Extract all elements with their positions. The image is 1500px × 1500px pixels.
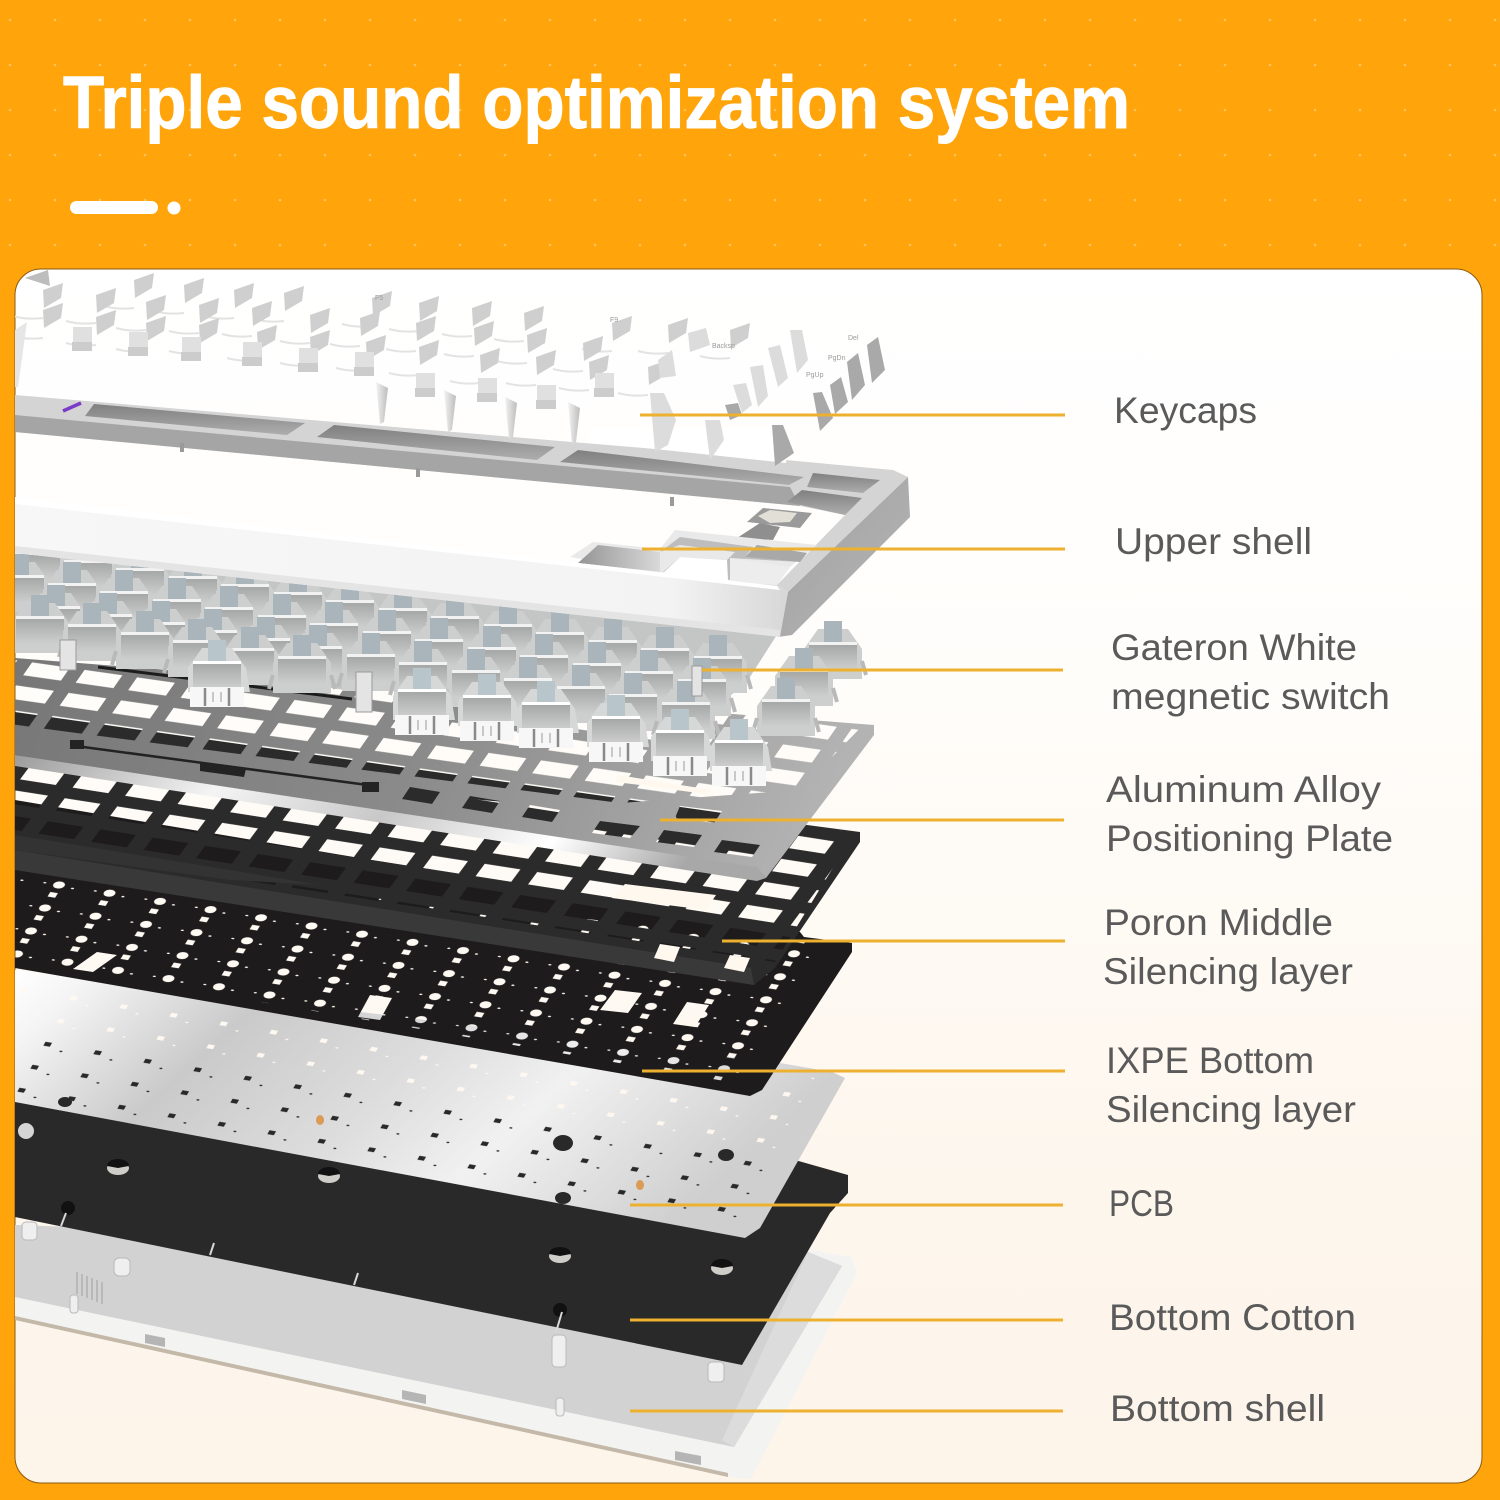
cutout band: [615, 775, 720, 796]
callout: IXPE Bottom Silencing layer: [642, 1040, 1356, 1130]
stabilizer clips: [60, 640, 702, 712]
callout: Aluminum Alloy Positioning Plate: Aluminum Alloy: [1106, 769, 1382, 810]
key legends: Backsp: [712, 343, 735, 350]
row 1 keys: [104, 273, 154, 309]
key legends: F9: [610, 317, 618, 324]
layer: bottom shell: [15, 1222, 857, 1479]
screw posts: [22, 1222, 724, 1416]
callout: Bottom shell: Bottom shell: [1110, 1388, 1325, 1429]
see-through windows: [612, 884, 750, 972]
panel: exploded keyboard card: [15, 269, 1482, 1483]
callout: Poron Middle Silencing layer: Silencing layer: [1103, 951, 1353, 992]
key legends: PgDn: [828, 355, 846, 362]
title: Triple sound optimization system: [63, 61, 1130, 144]
layer: IXPE bottom silencing sheet: [15, 800, 852, 1096]
layer: PCB: [15, 970, 845, 1238]
background dot pattern: [0, 0, 1500, 268]
right frame side face: [778, 477, 910, 637]
corner block: [730, 580, 770, 584]
callout: Gateron White megnetic switch: [702, 627, 1390, 717]
key legends: F5: [375, 295, 383, 302]
layer: bottom cotton: [15, 1025, 848, 1365]
window through corner: [663, 557, 728, 580]
gold screws on PCB: [316, 1115, 644, 1190]
key legends: Del: [848, 335, 859, 342]
right side key walls: [650, 328, 808, 460]
callout: Poron Middle Silencing layer: [722, 902, 1353, 992]
key stems: [376, 382, 388, 424]
callout: Aluminum Alloy Positioning Plate: Positioning Plate: [1106, 818, 1393, 859]
corner key shadow: [25, 270, 50, 286]
key sides: [72, 327, 92, 351]
callout: IXPE Bottom Silencing layer: IXPE Bottom: [1106, 1040, 1314, 1081]
layer: keycaps: [13, 270, 885, 466]
callout: Aluminum Alloy Positioning Plate: [660, 769, 1393, 859]
locating pins: [180, 443, 674, 506]
knob beam and mount: [737, 523, 780, 540]
back rail and right frame top: [15, 395, 908, 592]
rail pockets: [85, 404, 880, 515]
callout: Upper shell: Upper shell: [1115, 521, 1312, 562]
layer: aluminum alloy positioning plate: [15, 658, 874, 881]
front bar: [15, 497, 788, 637]
layer: upper shell: [15, 395, 910, 637]
callout: Bottom Cotton: Bottom Cotton: [1109, 1297, 1356, 1338]
row 3 keys: [24, 303, 63, 340]
accent: dash and dot: [70, 201, 180, 214]
key legends: [375, 295, 859, 379]
callout: Poron Middle Silencing layer: Poron Middle: [1104, 902, 1333, 943]
layer: Gateron White magnetic switches: [0, 531, 866, 786]
exploded keyboard layers: [0, 270, 910, 1479]
key legends: PgUp: [806, 372, 824, 379]
callout: PCB: PCB: [1109, 1183, 1174, 1224]
row 2 keys: [13, 283, 63, 319]
callout: Gateron White megnetic switch: megnetic switch: [1111, 676, 1390, 717]
callout: Gateron White megnetic switch: Gateron White: [1111, 627, 1357, 668]
LED strip: [63, 403, 81, 411]
callout: IXPE Bottom Silencing layer: Silencing layer: [1106, 1089, 1356, 1130]
corner wall rim: [570, 530, 816, 572]
stabilizer slot: [76, 746, 375, 786]
left corner pocket: [578, 545, 660, 572]
layer: Poron middle silencing layer: [15, 712, 860, 985]
callout: Keycaps: Keycaps: [1114, 390, 1257, 431]
slot behind switches: [98, 666, 352, 700]
right corner pocket: [745, 545, 807, 562]
